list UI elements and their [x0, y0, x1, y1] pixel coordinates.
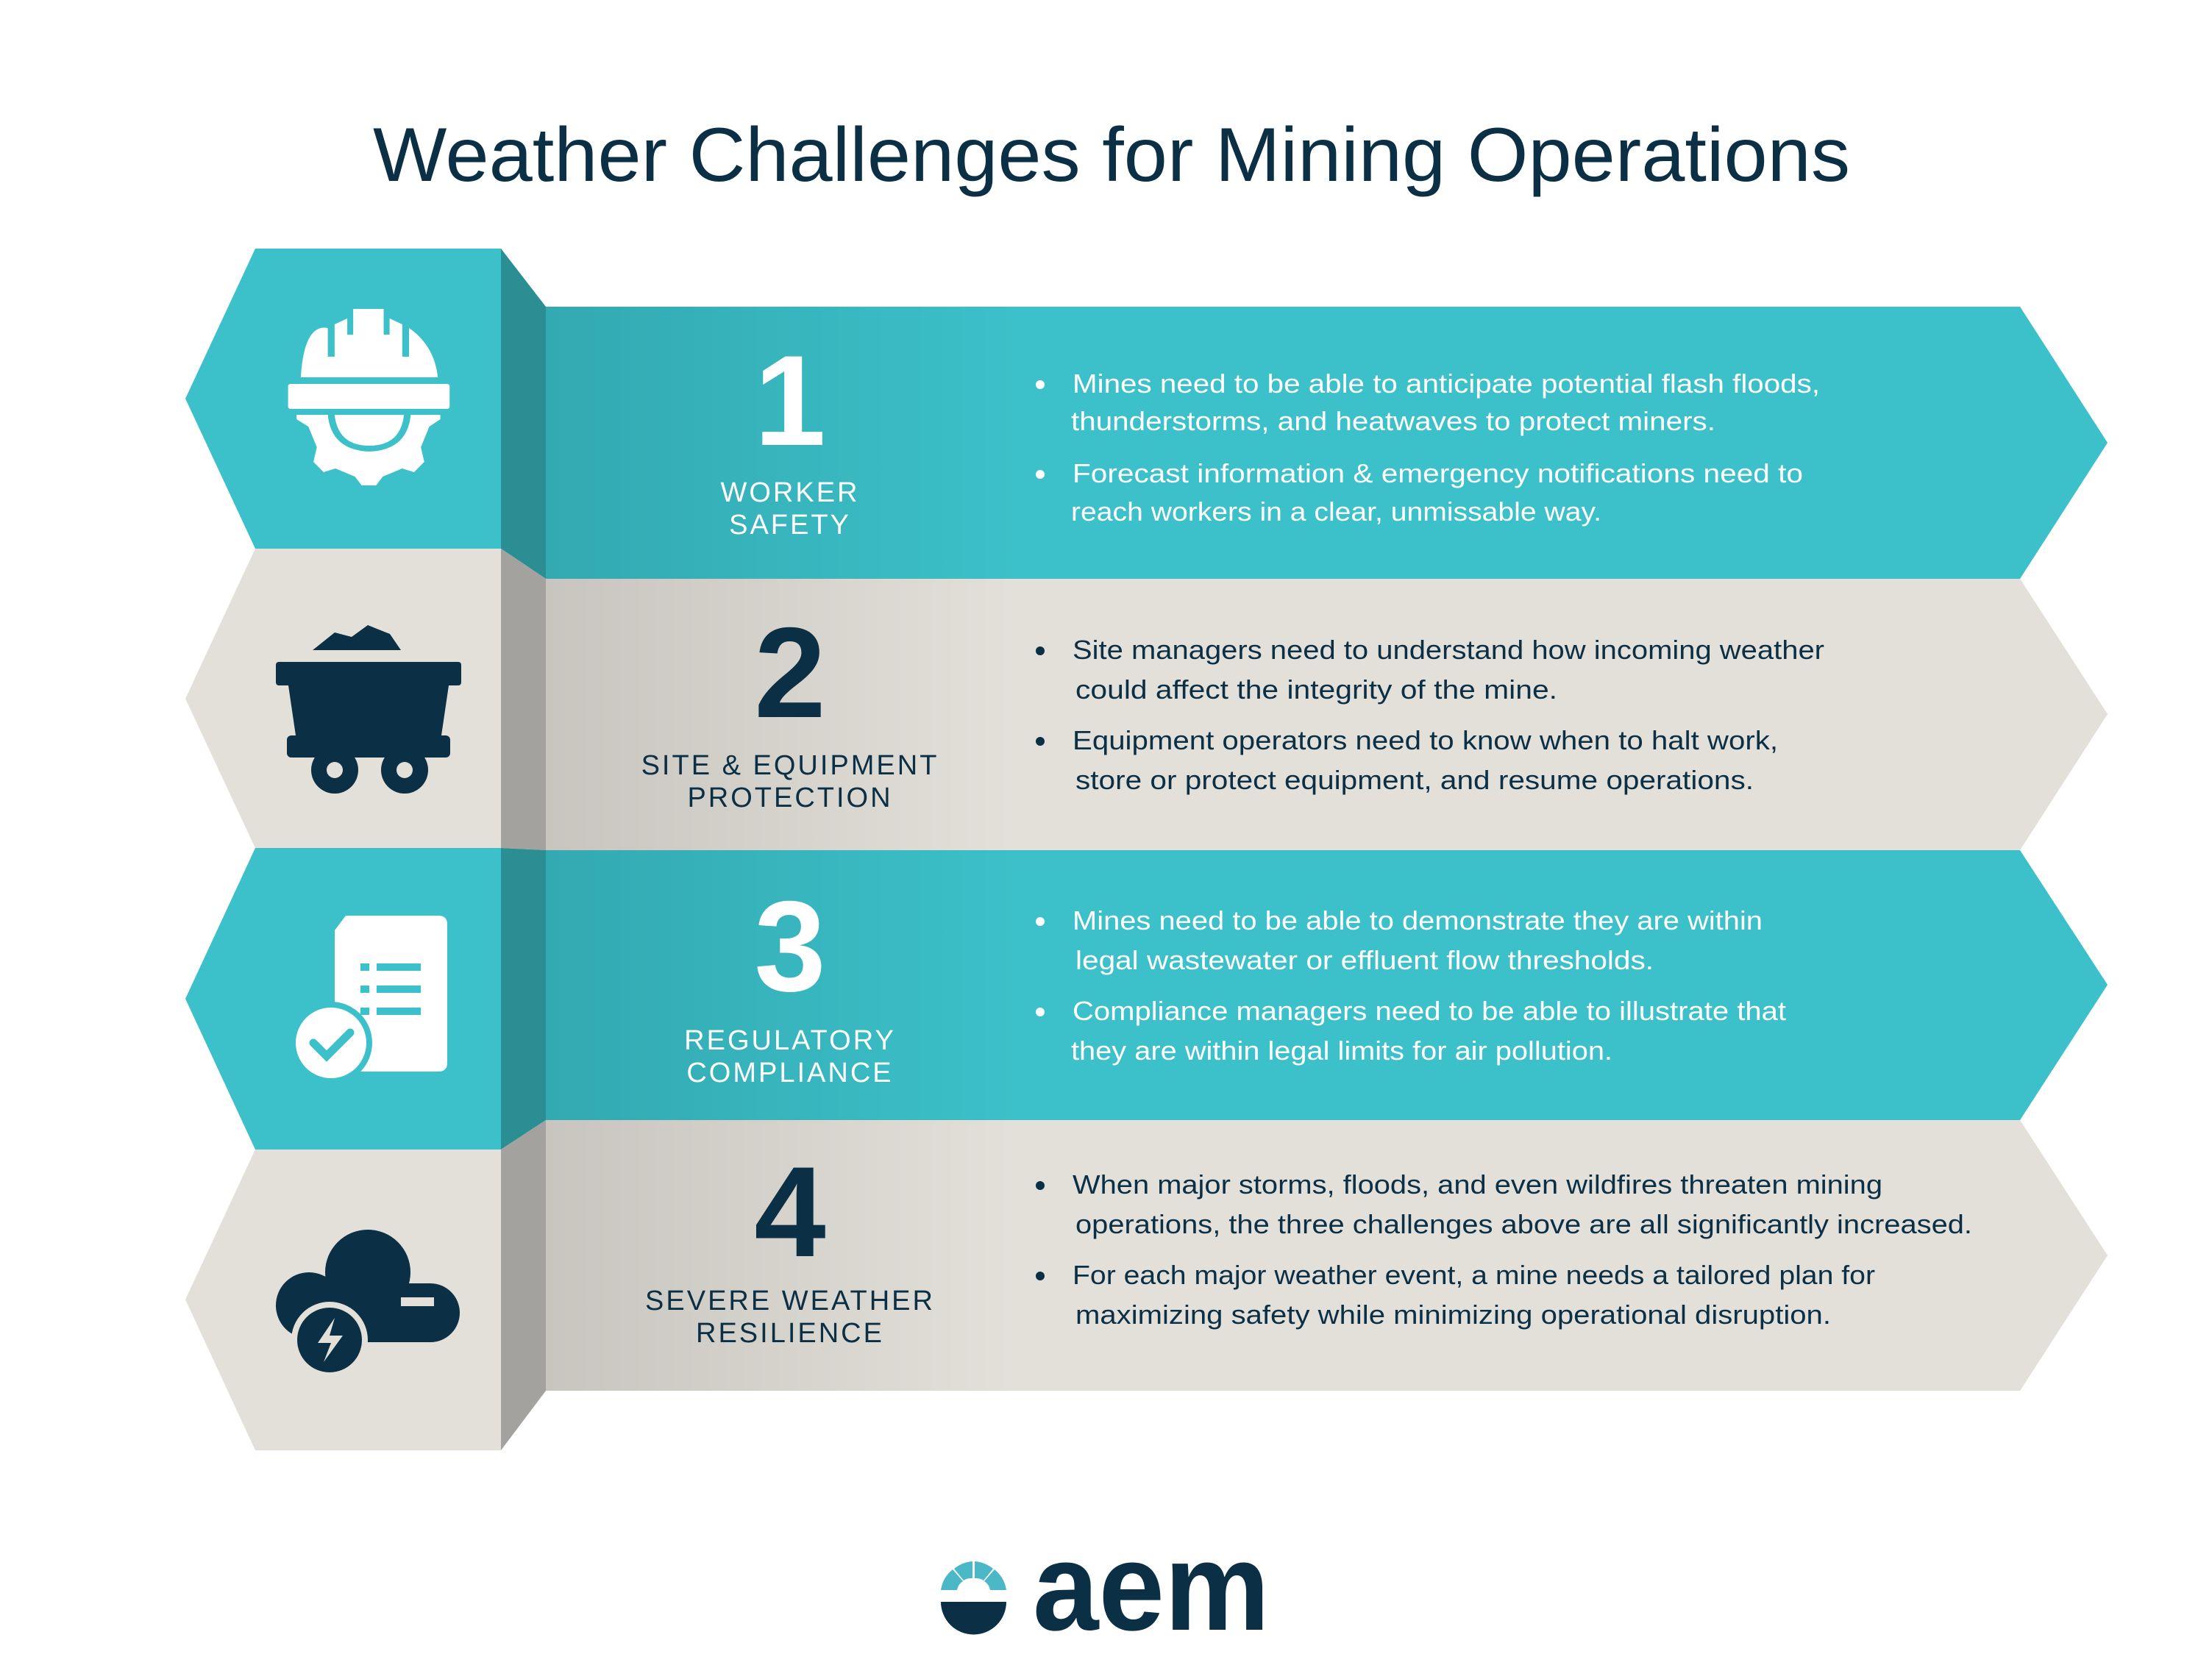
band 2: site & equipment	[185, 549, 2108, 850]
bullets 2: Site managers need to understand how incoming weather	[1073, 635, 1824, 665]
bullets 2: could affect the integrity of the mine.	[1075, 674, 1557, 705]
number 3: 3	[754, 875, 826, 1019]
bullets 1: reach workers in a clear, unmissable way.	[1071, 496, 1601, 527]
bullets 3: legal wastewater or effluent flow thresholds.	[1075, 945, 1654, 975]
title: Weather Challenges for Mining Operations	[373, 113, 1850, 198]
bullets 1: thunderstorms, and heatwaves to protect miners.	[1071, 406, 1715, 436]
number 2: 2	[754, 602, 826, 745]
tile 3	[185, 848, 501, 1150]
bullets 1	[1036, 368, 1820, 527]
band 1: worker safety	[185, 249, 2108, 579]
band 2: site & equipment: PROTECTION	[687, 783, 893, 813]
label 3: REGULATORY	[684, 1025, 896, 1056]
bullets 4: operations, the three challenges above are all significantly increased.	[1075, 1209, 1972, 1239]
band 3: regulatory compliance	[185, 848, 2108, 1150]
bullets 4: When major storms, floods, and even wildfires threaten mining	[1073, 1169, 1882, 1200]
tile 1	[185, 249, 501, 549]
label 4: SEVERE WEATHER	[645, 1286, 935, 1316]
logo	[941, 1517, 1270, 1657]
bullets 1: Forecast information & emergency notifications need to	[1073, 458, 1803, 488]
bullets 1: Mines need to be able to anticipate potential flash floods,	[1073, 368, 1820, 399]
icon: helmet gear	[288, 309, 449, 485]
icon: document check	[290, 916, 447, 1084]
bullets 3: Compliance managers need to be able to illustrate that	[1073, 996, 1786, 1026]
label 2: SITE & EQUIPMENT	[641, 750, 939, 781]
band 4: severe weather: RESILIENCE	[696, 1318, 884, 1349]
bullets 4: maximizing safety while minimizing operational disruption.	[1075, 1300, 1831, 1330]
tile 4	[185, 1150, 501, 1450]
label 1: WORKER	[721, 477, 859, 508]
number 4: 4	[754, 1141, 826, 1284]
number 1: 1	[754, 329, 826, 473]
tile 2	[185, 549, 501, 848]
band 1: worker safety: SAFETY	[729, 510, 851, 541]
bullets 4: For each major weather event, a mine needs a tailored plan for	[1073, 1260, 1875, 1290]
icon: storm cloud	[276, 1230, 460, 1378]
bullets 3: Mines need to be able to demonstrate they are within	[1073, 905, 1763, 935]
band 4: severe weather	[185, 1120, 2108, 1450]
bullets 3	[1036, 905, 1786, 1066]
icon: mine cart	[276, 625, 461, 794]
bullets 3: they are within legal limits for air pollution.	[1071, 1036, 1612, 1066]
bullets 2: store or protect equipment, and resume operations.	[1075, 765, 1754, 795]
band 3: regulatory compliance: COMPLIANCE	[686, 1058, 894, 1088]
bullets 2	[1036, 635, 1824, 795]
logo: aem	[1033, 1517, 1270, 1657]
bullets 2: Equipment operators need to know when to halt work,	[1073, 725, 1778, 755]
bullets 4	[1036, 1169, 1972, 1330]
